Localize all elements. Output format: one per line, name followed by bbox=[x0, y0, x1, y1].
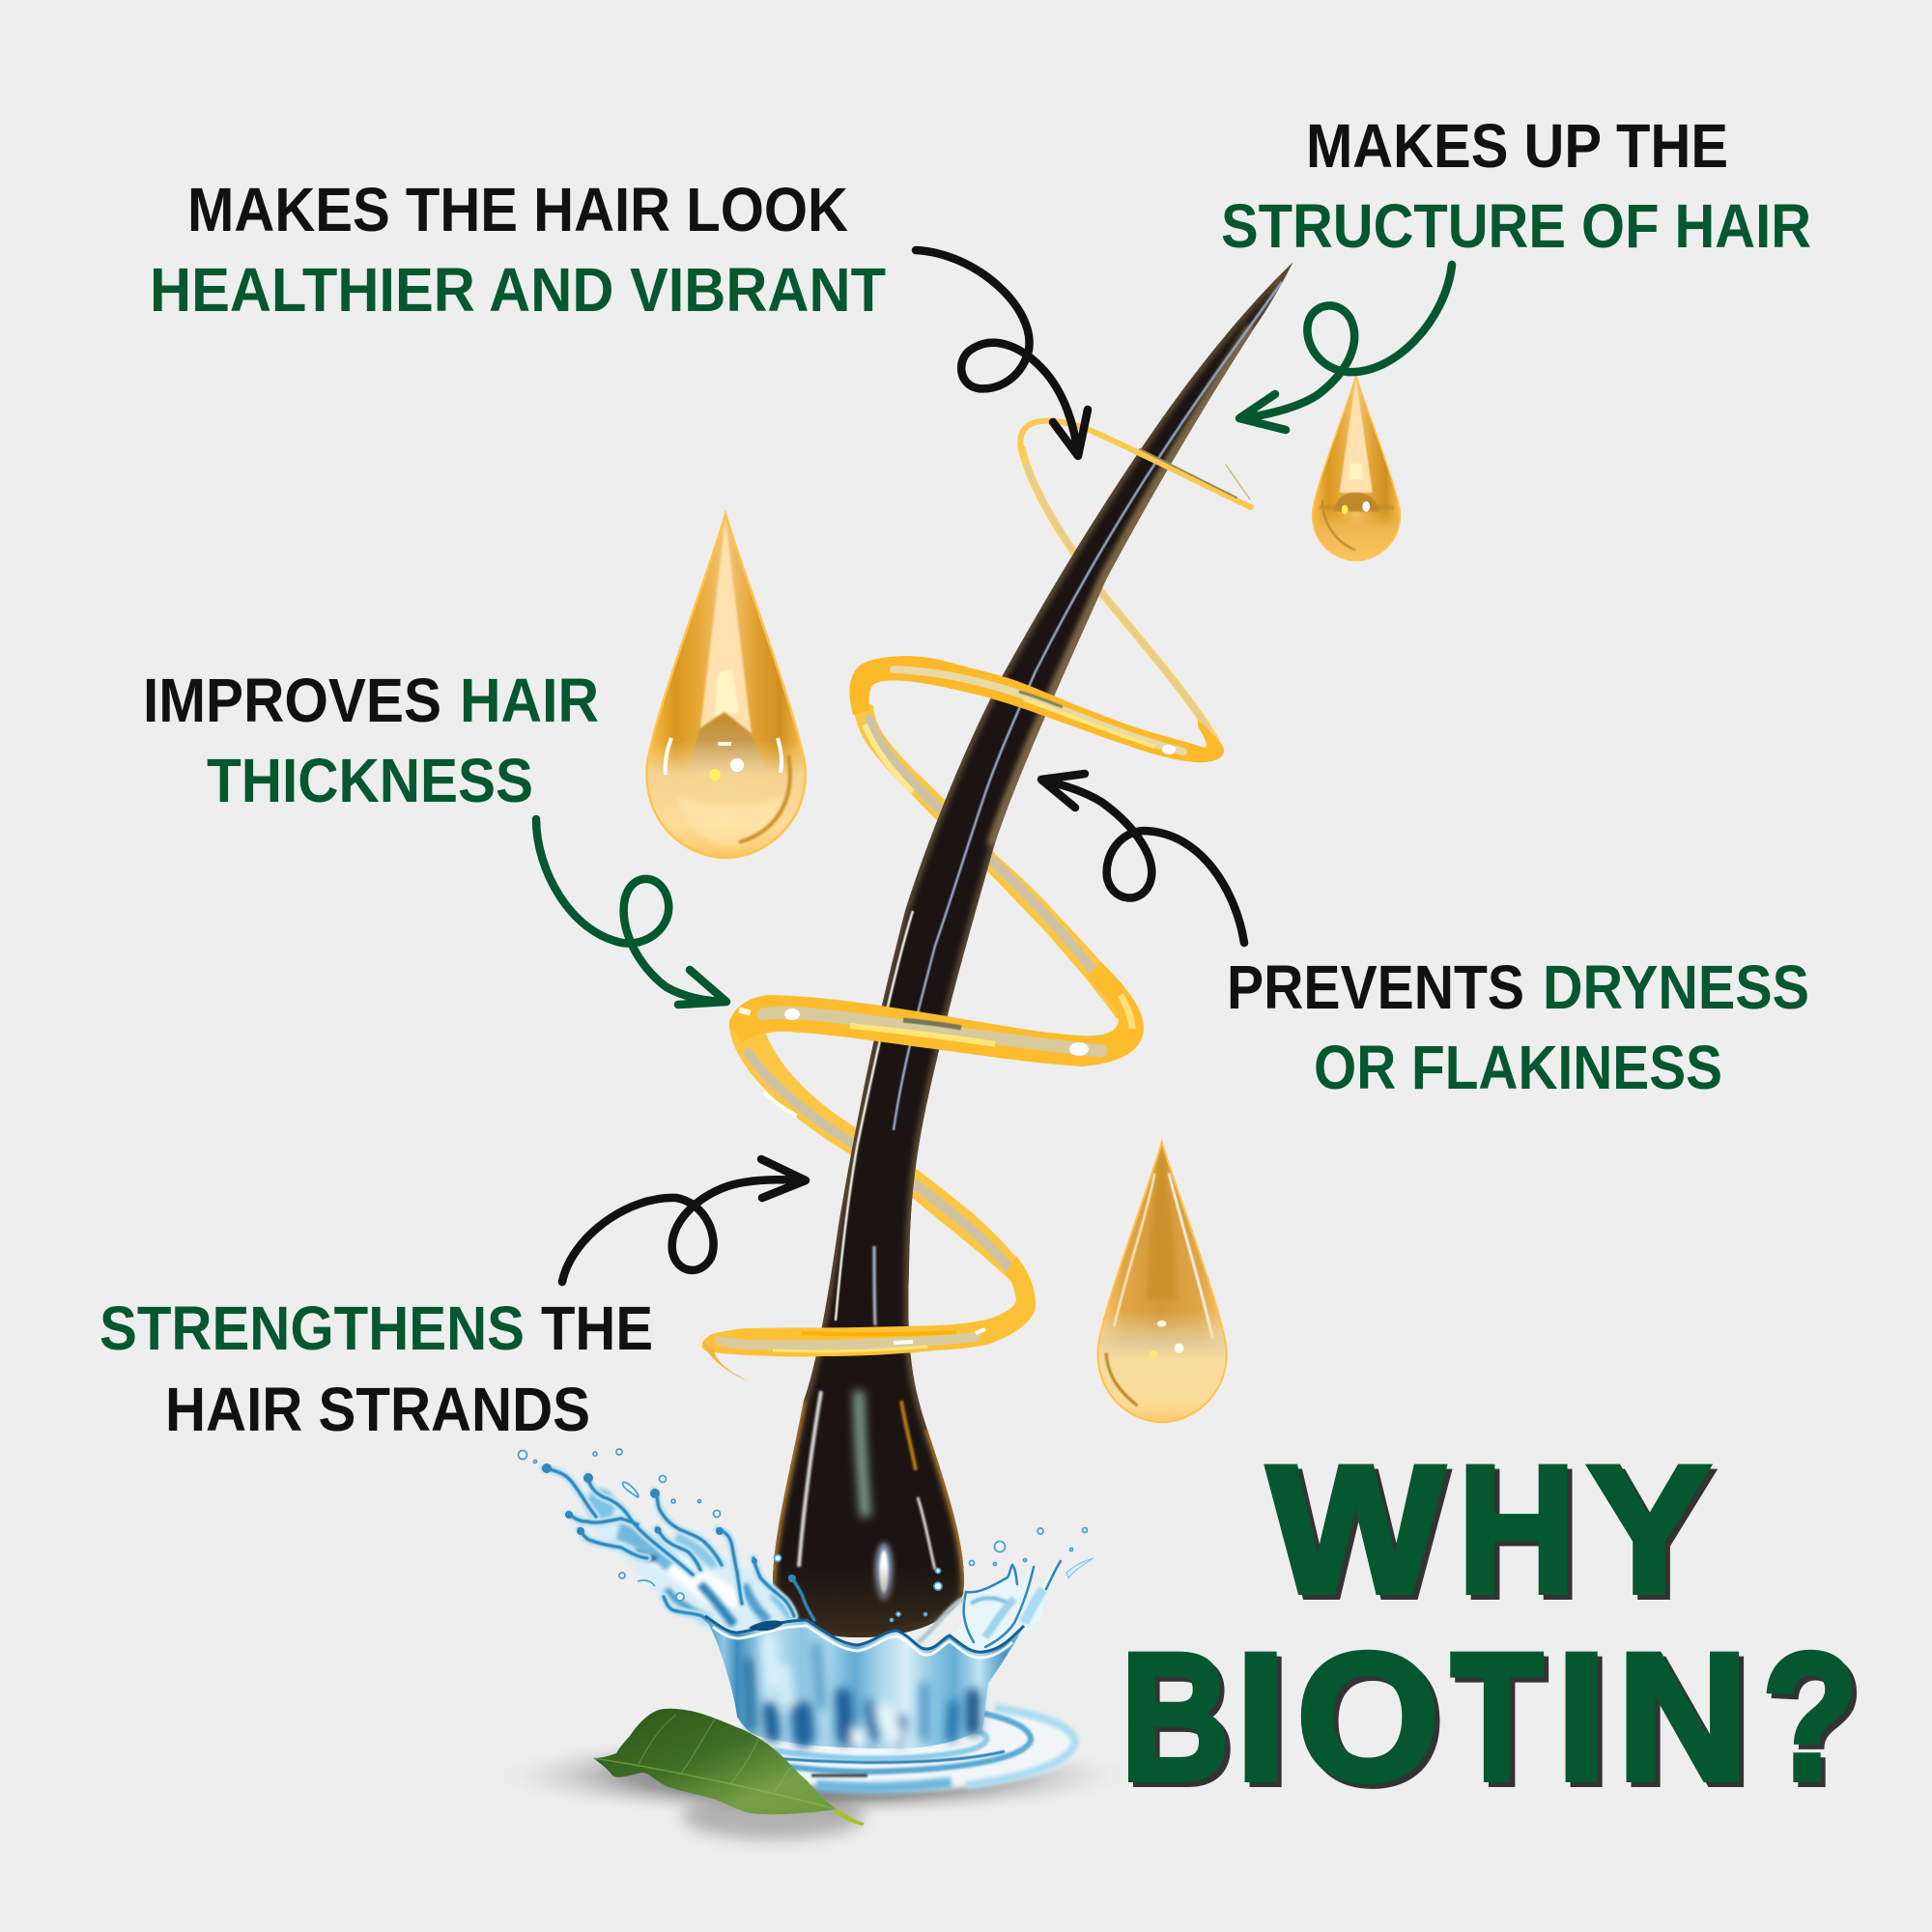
text: makes the hair look healthier and vibrant: MAKES THE HAIR LOOK bbox=[187, 175, 848, 244]
text: makes up the structure of hair bbox=[1221, 111, 1811, 261]
text: prevents dryness or flakiness: PREVENTS bbox=[1227, 952, 1524, 1022]
text: improves hair thickness: THICKNESS bbox=[207, 746, 533, 815]
text: strengthens the hair strands: STRENGTHENS bbox=[99, 1293, 525, 1363]
text: prevents dryness or flakiness: DRYNESS bbox=[1543, 952, 1809, 1022]
text: prevents dryness or flakiness bbox=[1227, 952, 1809, 1102]
splash crown right bbox=[918, 1558, 1094, 1651]
arrow: black bottom bbox=[562, 1159, 806, 1282]
arrow: black top bbox=[916, 250, 1088, 456]
oil drop: large bbox=[642, 514, 811, 862]
title: why biotin?: H bbox=[1463, 1433, 1580, 1635]
oil drop: lower right bbox=[1094, 1142, 1232, 1425]
title: why biotin?: I bbox=[1556, 1615, 1606, 1818]
text: strengthens the hair strands: HAIR STRANDS bbox=[165, 1375, 590, 1444]
arrow: green top right bbox=[1239, 265, 1452, 430]
arrow: black right bbox=[1041, 774, 1244, 943]
title: why biotin?: H bbox=[1458, 1428, 1576, 1631]
splash wing left bbox=[542, 1463, 814, 1637]
text: strengthens the hair strands: THE bbox=[541, 1293, 653, 1363]
title: why biotin?: W bbox=[1267, 1429, 1444, 1631]
crown body bbox=[705, 1616, 1024, 1748]
title: why biotin?: ? bbox=[1762, 1615, 1859, 1819]
title: why biotin?: N bbox=[1617, 1615, 1748, 1818]
title: why biotin?: N bbox=[1622, 1620, 1753, 1823]
title: why biotin?: O bbox=[1296, 1616, 1439, 1819]
front ring: second bbox=[849, 656, 1224, 762]
front segments of oil spiral bbox=[702, 421, 1251, 1381]
text: makes up the structure of hair: STRUCTURE OF HAIR bbox=[1221, 191, 1811, 261]
text: improves hair thickness: HAIR bbox=[460, 666, 599, 735]
title: why biotin?: T bbox=[1456, 1620, 1548, 1823]
back segments of oil spiral bbox=[729, 449, 1215, 1303]
title: why biotin?: B bbox=[1125, 1620, 1235, 1823]
water droplets bbox=[518, 1449, 1088, 1621]
arrow: green left bbox=[536, 819, 726, 1005]
front ring: top bbox=[1020, 421, 1251, 507]
title: why biotin?: I bbox=[1236, 1615, 1286, 1818]
title: why biotin?: W bbox=[1272, 1434, 1449, 1635]
front ring: fourth bbox=[702, 1256, 1036, 1381]
leaf bbox=[593, 1709, 865, 1826]
text: makes the hair look healthier and vibrant bbox=[150, 175, 886, 325]
ground shadow bbox=[484, 1731, 1141, 1839]
title: why biotin?: T bbox=[1451, 1615, 1543, 1818]
text: strengthens the hair strands bbox=[99, 1293, 653, 1444]
text: makes up the structure of hair: MAKES UP THE bbox=[1306, 111, 1728, 181]
title: why biotin?: Y bbox=[1592, 1434, 1716, 1636]
oil drop: small top right bbox=[1310, 376, 1404, 562]
title: why biotin?: I bbox=[1240, 1620, 1291, 1823]
hair strand bbox=[768, 263, 1293, 1642]
water ripples bbox=[710, 1702, 1077, 1791]
text: prevents dryness or flakiness: OR FLAKINESS bbox=[1314, 1033, 1722, 1102]
title: why biotin?: ? bbox=[1767, 1620, 1863, 1824]
title: why biotin?: B bbox=[1121, 1615, 1230, 1818]
text: makes the hair look healthier and vibrant: HEALTHIER AND VIBRANT bbox=[150, 255, 886, 325]
title: why biotin?: Y bbox=[1587, 1429, 1711, 1632]
water splash bbox=[518, 1449, 1094, 1748]
text: improves hair thickness: IMPROVES bbox=[143, 666, 441, 735]
title: why biotin?: I bbox=[1561, 1620, 1611, 1823]
front ring: third bbox=[729, 962, 1144, 1066]
title: why biotin? bbox=[1121, 1428, 1863, 1824]
text: improves hair thickness bbox=[143, 666, 599, 815]
title: why biotin?: O bbox=[1301, 1621, 1444, 1824]
